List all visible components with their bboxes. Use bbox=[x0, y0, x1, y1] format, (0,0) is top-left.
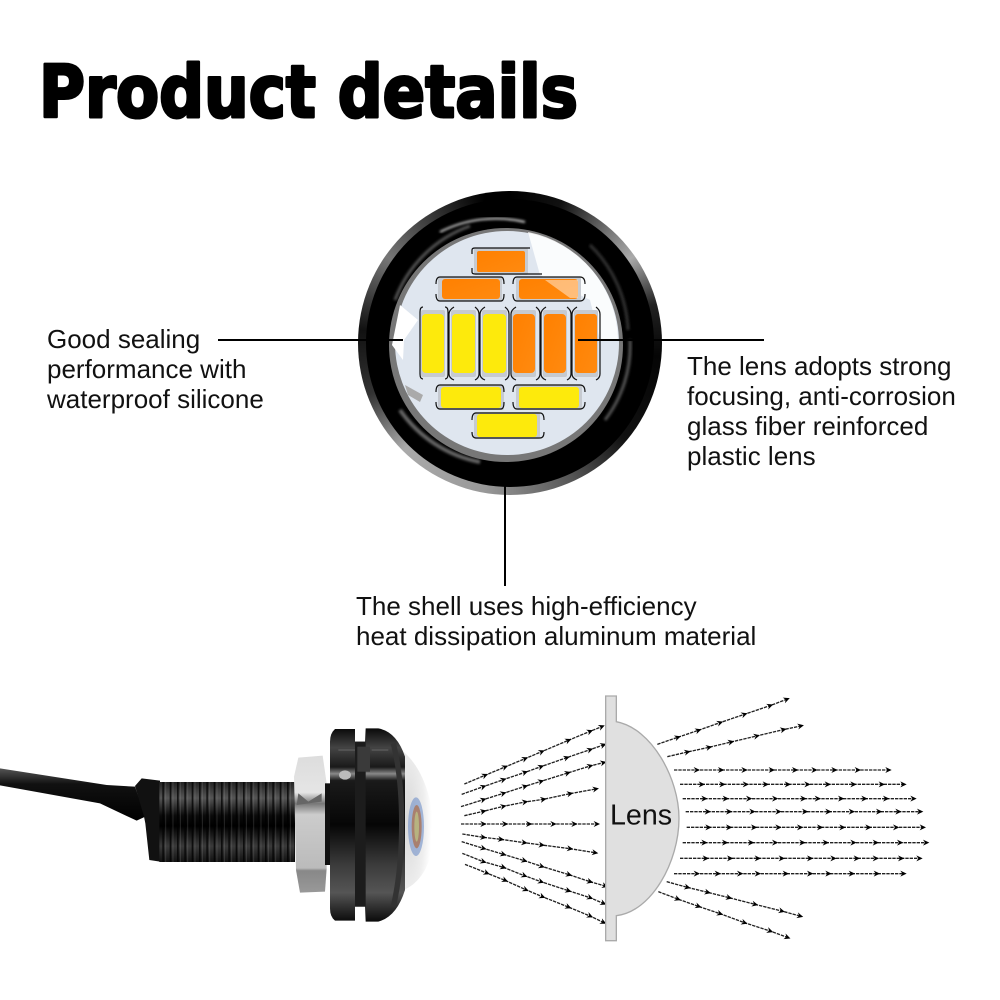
panel: LED lamp side view bbox=[0, 728, 428, 922]
callout: lens: focusing, anti-corrosion bbox=[687, 381, 956, 411]
bezel ring bbox=[358, 191, 662, 495]
callout: lens: The lens adopts strong bbox=[687, 351, 952, 381]
rays leaving bbox=[657, 699, 926, 937]
callout: sealing bbox=[47, 324, 264, 414]
panel: LED lamp front view bbox=[358, 191, 662, 495]
title: Product details bbox=[39, 50, 578, 134]
threaded shaft bbox=[159, 782, 295, 862]
lens dome bbox=[402, 750, 433, 890]
callout: shell: The shell uses high-efficiency bbox=[356, 591, 697, 621]
lens and LED chips bbox=[366, 201, 654, 487]
callout: sealing: waterproof silicone bbox=[47, 384, 264, 414]
callout: lens bbox=[687, 351, 956, 471]
diagram: lens refraction bbox=[460, 695, 930, 942]
housing bbox=[325, 728, 405, 922]
callout: lens: glass fiber reinforced bbox=[687, 411, 928, 441]
lens shape: Lens bbox=[610, 799, 672, 831]
callout: shell bbox=[356, 591, 756, 651]
rays entering bbox=[461, 727, 605, 922]
callout: lens: plastic lens bbox=[687, 441, 816, 471]
callout: shell: heat dissipation aluminum material bbox=[356, 621, 756, 651]
lens shape bbox=[606, 696, 679, 941]
callout: sealing: Good sealing bbox=[47, 324, 200, 354]
cable bbox=[0, 768, 145, 821]
hex nut bbox=[294, 756, 327, 893]
callout: sealing: performance with bbox=[47, 354, 246, 384]
